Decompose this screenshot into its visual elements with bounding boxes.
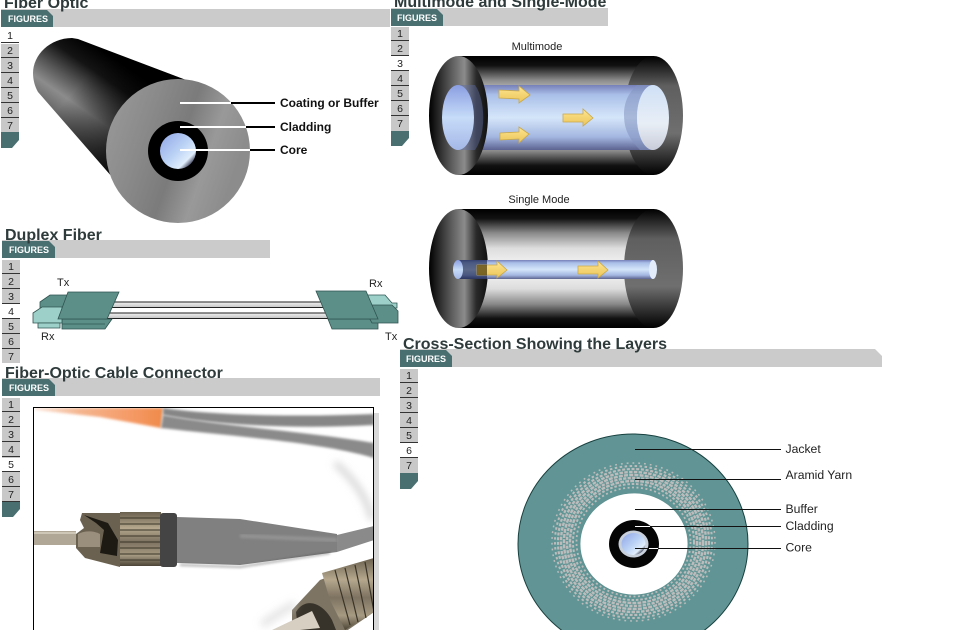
header bar: cross-section: FIGURES	[406, 354, 446, 364]
number tabs: cross-section: 6	[406, 445, 412, 457]
label: multimode: Multimode	[512, 41, 562, 53]
number tabs: connector: 6	[8, 474, 14, 486]
core	[618, 530, 648, 558]
callouts: fiber layers: Coating or Buffer	[280, 96, 379, 110]
aramid yarn	[552, 463, 715, 621]
number tabs: fiber optic: 1	[7, 30, 13, 42]
number tabs: fiber optic: 6	[7, 105, 13, 117]
header bar: fiber optic	[1, 9, 390, 27]
number tabs: cross-section: 4	[406, 415, 412, 427]
panel: cross-section layers	[400, 336, 882, 630]
number tabs: multimode: 5	[397, 88, 403, 100]
header bar: fiber optic: FIGURES	[8, 14, 48, 24]
diagram: single mode fiber	[429, 209, 683, 328]
number tabs: fiber optic: 3	[7, 60, 13, 72]
header bar: connector	[2, 378, 380, 396]
number tabs: connector: 7	[8, 489, 14, 501]
header bar: cross-section	[400, 349, 882, 367]
left connector	[33, 292, 119, 329]
labels: duplex ports: Rx	[369, 278, 383, 290]
panel: fiber optic	[1, 0, 390, 223]
callouts: fiber layers: Core	[280, 143, 308, 157]
number tabs: multimode	[391, 27, 409, 146]
diagram: duplex cable	[33, 291, 398, 329]
number tabs: multimode: 3	[397, 58, 403, 70]
panel: multimode and single-mode	[391, 0, 683, 328]
number tabs: connector: 1	[8, 399, 14, 411]
number tabs: duplex: 6	[8, 336, 14, 348]
number tabs: multimode: 6	[397, 103, 403, 115]
number tabs: fiber optic: 7	[7, 120, 13, 132]
number tabs: duplex: 2	[8, 276, 14, 288]
number tabs: duplex: 1	[8, 261, 14, 273]
heading: fiber-optic cable connector: Fiber-Optic Cable Connector	[5, 365, 223, 382]
number tabs: cross-section: 3	[406, 400, 412, 412]
number tabs: multimode: 2	[397, 43, 403, 55]
number tabs: multimode: 4	[397, 73, 403, 85]
diagram: cable cross-section	[518, 434, 748, 630]
labels: duplex ports: Tx	[385, 331, 398, 343]
number tabs: cross-section: 1	[406, 370, 412, 382]
number tabs: multimode: 7	[397, 118, 403, 130]
photo: ST connector	[34, 408, 379, 630]
number tabs: fiber optic: 2	[7, 45, 13, 57]
heading: duplex fiber: Duplex Fiber	[5, 227, 102, 244]
number tabs: cross-section: 7	[406, 460, 412, 472]
diagram: fiber cylinder	[33, 38, 250, 223]
header bar: multimode	[391, 8, 608, 26]
number tabs: connector: 5	[8, 459, 14, 471]
number tabs: duplex: 3	[8, 291, 14, 303]
number tabs: connector: 2	[8, 414, 14, 426]
header bar: duplex	[2, 240, 270, 258]
labels: duplex ports: Rx	[41, 331, 55, 343]
number tabs: duplex: 7	[8, 351, 14, 363]
callouts: cable layers	[635, 442, 852, 554]
header bar: duplex: FIGURES	[9, 245, 49, 255]
callouts: cable layers: Jacket	[786, 442, 821, 456]
diagram: multimode fiber	[429, 56, 683, 175]
number tabs: fiber optic: 5	[7, 90, 13, 102]
number tabs: cross-section	[400, 369, 418, 489]
number tabs: connector: 3	[8, 429, 14, 441]
number tabs: duplex: 4	[8, 306, 14, 318]
callouts: cable layers: Cladding	[786, 519, 834, 533]
callouts: fiber layers: Cladding	[280, 120, 331, 134]
number tabs: connector: 4	[8, 444, 14, 456]
arrows: multimode	[499, 86, 593, 143]
number tabs: connector	[2, 398, 20, 517]
number tabs: cross-section: 2	[406, 385, 412, 397]
callouts: fiber layers	[180, 96, 379, 157]
heading: cross-section: Cross-Section Showing the Layers	[403, 336, 667, 353]
cladding	[609, 520, 659, 568]
callouts: cable layers: Aramid Yarn	[786, 468, 852, 482]
panel: cable connector	[2, 365, 380, 630]
jacket	[518, 434, 748, 630]
labels: duplex ports: Tx	[57, 277, 70, 289]
right connector	[316, 291, 398, 329]
labels: duplex ports	[41, 277, 398, 343]
arrows: single mode	[477, 261, 608, 278]
callouts: cable layers: Core	[786, 540, 812, 554]
buffer	[580, 493, 688, 595]
number tabs: cross-section: 5	[406, 430, 412, 442]
callouts: cable layers: Buffer	[786, 502, 818, 516]
number tabs: duplex: 5	[8, 321, 14, 333]
number tabs: fiber optic	[1, 30, 19, 148]
header bar: multimode: FIGURES	[397, 13, 437, 23]
header bar: connector: FIGURES	[9, 383, 49, 393]
label: single mode: Single Mode	[508, 194, 570, 206]
number tabs: fiber optic: 4	[7, 75, 13, 87]
number tabs: duplex	[2, 260, 20, 363]
number tabs: multimode: 1	[397, 28, 403, 40]
panel: duplex fiber	[2, 227, 398, 363]
